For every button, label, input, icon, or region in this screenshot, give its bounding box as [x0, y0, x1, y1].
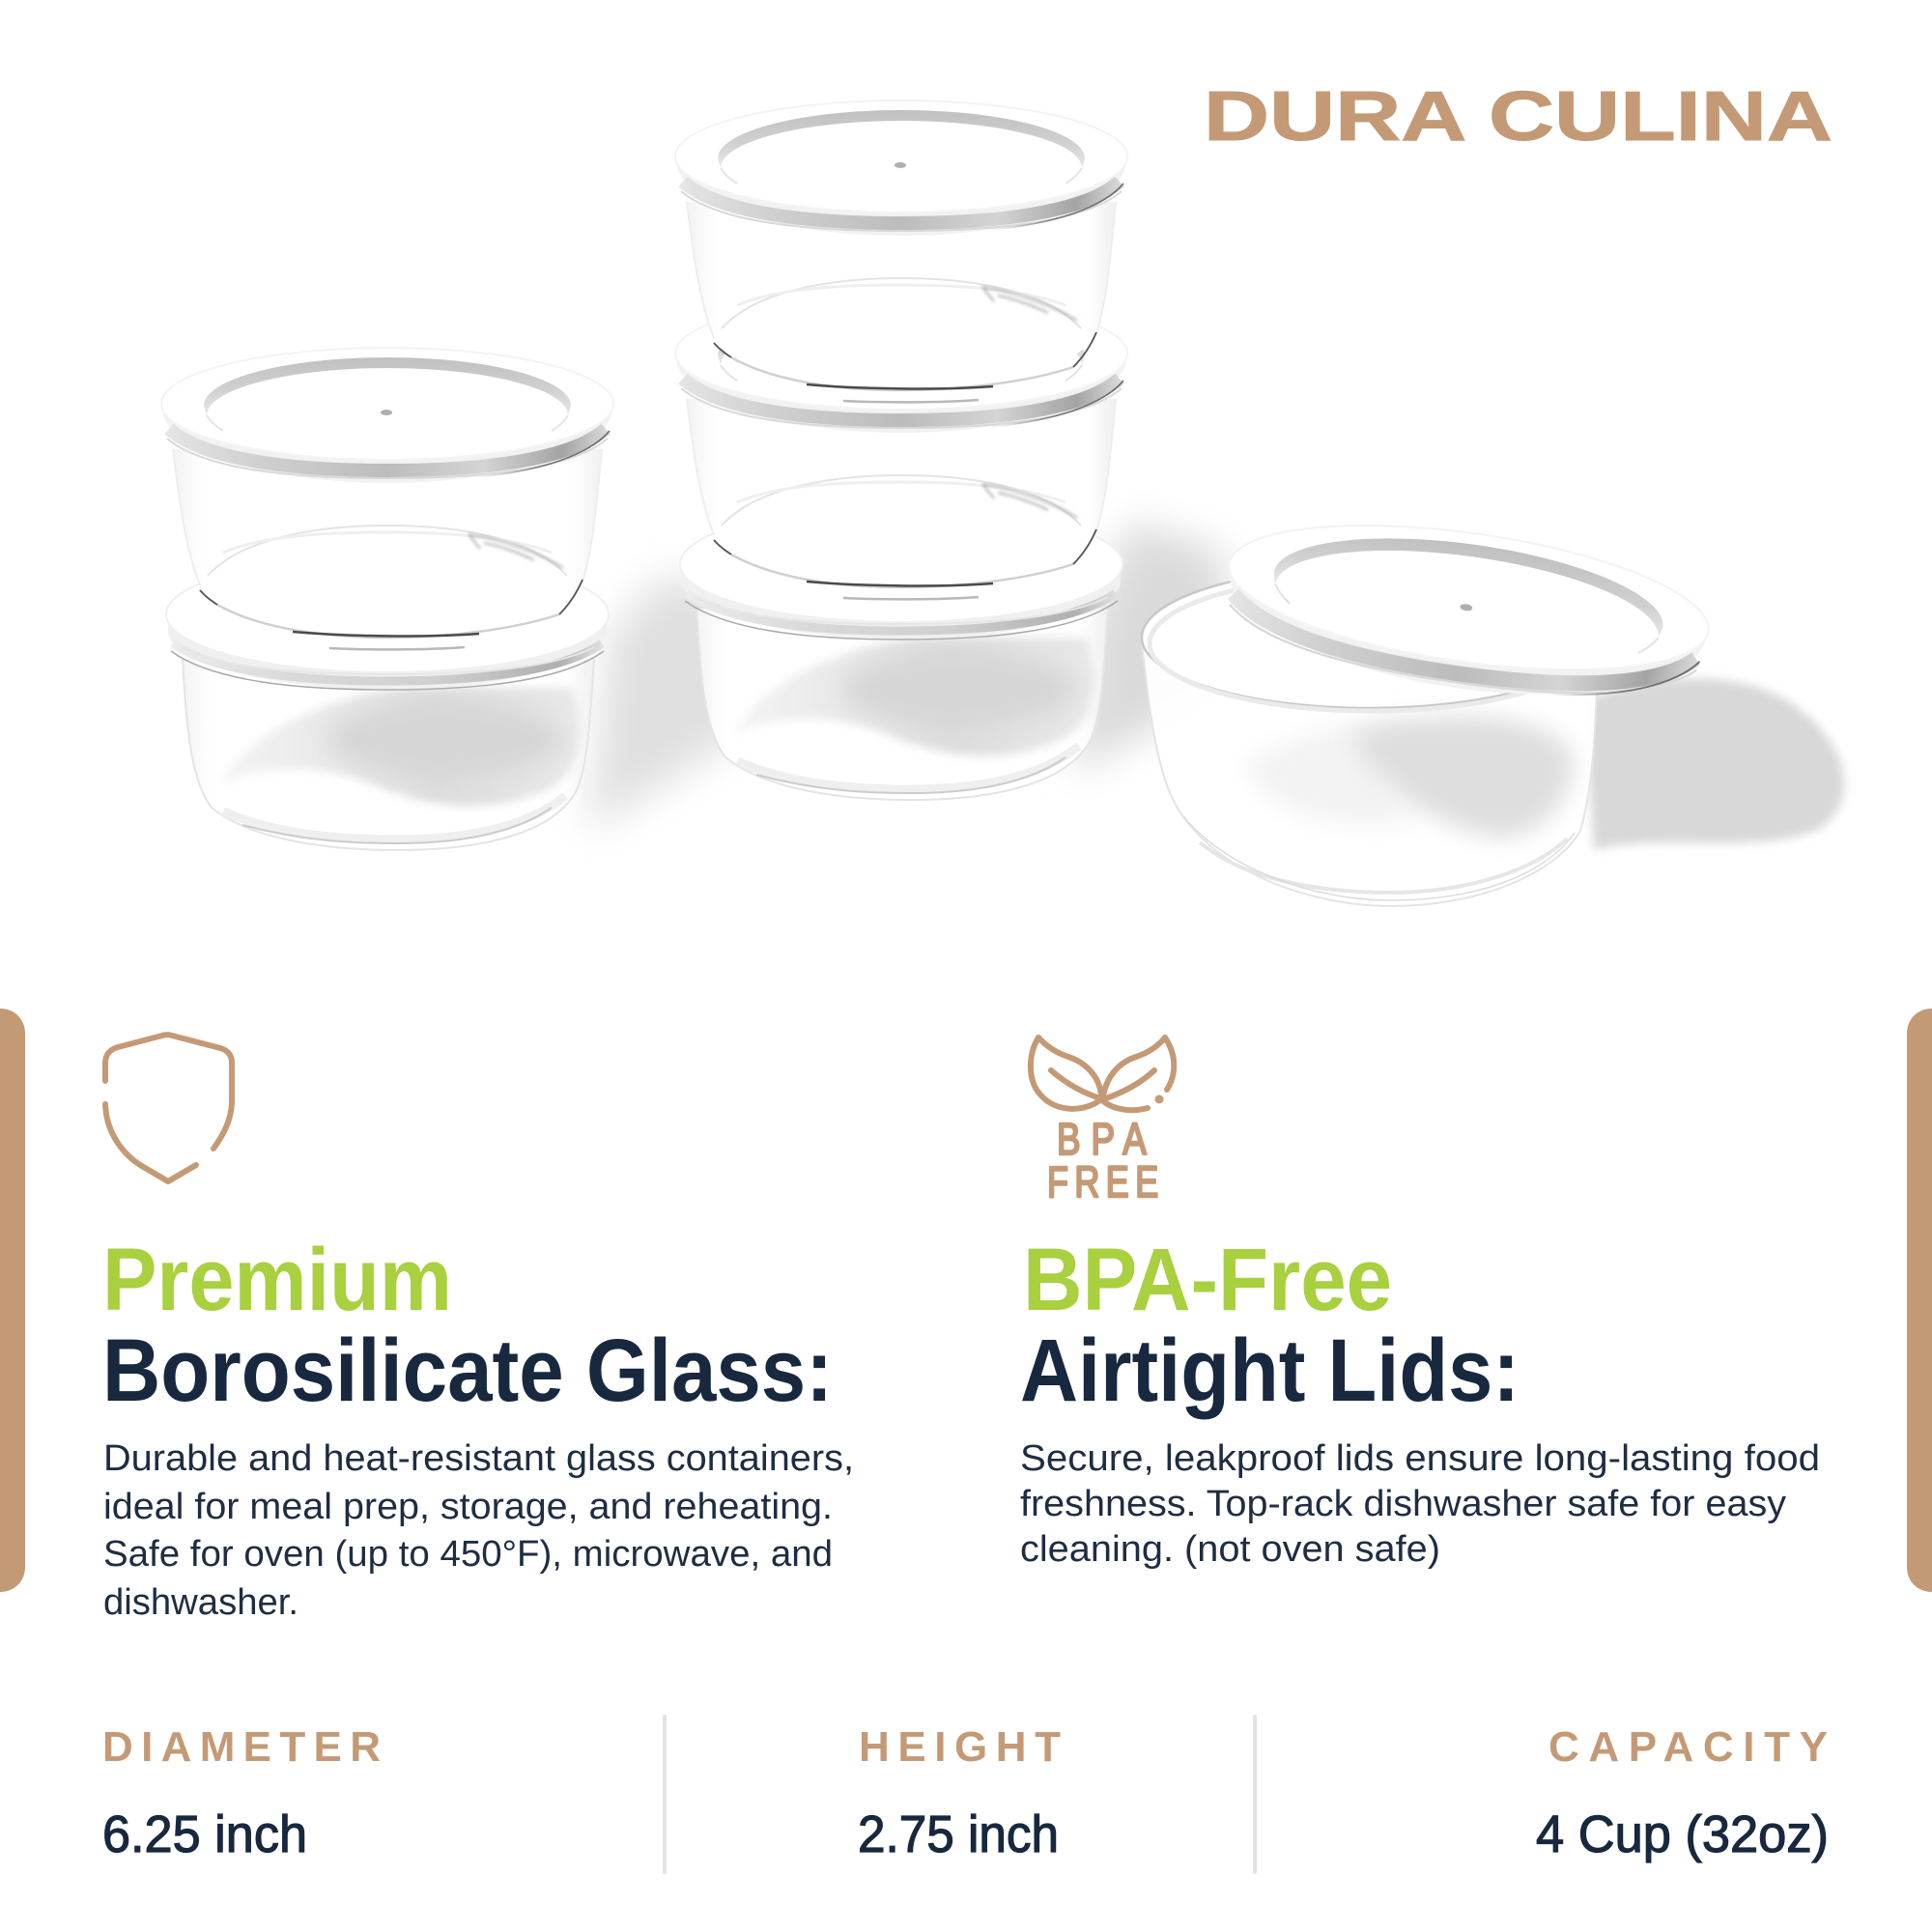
- heading: borosilicate glass: Borosilicate Glass:: [102, 1321, 833, 1420]
- body text: [1020, 1438, 1820, 1570]
- product: middle stack of three containers: [675, 100, 1127, 800]
- label: CAPACITY: [1548, 1723, 1828, 1771]
- body text: ideal for meal prep, storage, and reheating.: [103, 1487, 833, 1527]
- heading: premium: Premium: [102, 1231, 452, 1329]
- body text: [103, 1438, 854, 1623]
- heading: bpa-free: BPA-Free: [1023, 1231, 1392, 1329]
- body text: dishwasher.: [103, 1582, 298, 1623]
- body text: Durable and heat-resistant glass containers,: [103, 1438, 854, 1479]
- panel: bpa-free airtight lids: [1020, 1037, 1820, 1570]
- spec: height: [858, 1723, 1061, 1863]
- body text: Secure, leakproof lids ensure long-lasting food: [1020, 1438, 1820, 1479]
- label: HEIGHT: [859, 1723, 1061, 1771]
- value: 4 Cup (32oz): [1536, 1805, 1829, 1863]
- right accent bar: [1907, 1009, 1932, 1592]
- value: 6.25 inch: [102, 1805, 307, 1863]
- spec: capacity: [1536, 1723, 1829, 1863]
- cast shadows behind containers: [589, 522, 1844, 850]
- icon: bpa free leaves: [1031, 1037, 1174, 1110]
- brand logo: DURA CULINA: [1204, 78, 1833, 156]
- left accent bar: [0, 1009, 25, 1592]
- body text: cleaning. (not oven safe): [1020, 1529, 1440, 1570]
- heading: airtight lids: Airtight Lids:: [1020, 1321, 1520, 1420]
- body text: Safe for oven (up to 450°F), microwave, and: [103, 1534, 833, 1575]
- icon text: free: FREE: [1047, 1157, 1158, 1207]
- body text: freshness. Top-rack dishwasher safe for easy: [1020, 1484, 1786, 1524]
- panel: premium borosilicate glass: [102, 1035, 854, 1623]
- spec: diameter: [102, 1723, 381, 1863]
- label: DIAMETER: [102, 1723, 381, 1771]
- icon text: bpa: BPA: [1057, 1114, 1147, 1164]
- product: left stack of two containers: [161, 348, 613, 850]
- value: 2.75 inch: [858, 1805, 1059, 1863]
- product: open container with tilted lid: [1142, 500, 1718, 906]
- icon: shield: [105, 1035, 232, 1181]
